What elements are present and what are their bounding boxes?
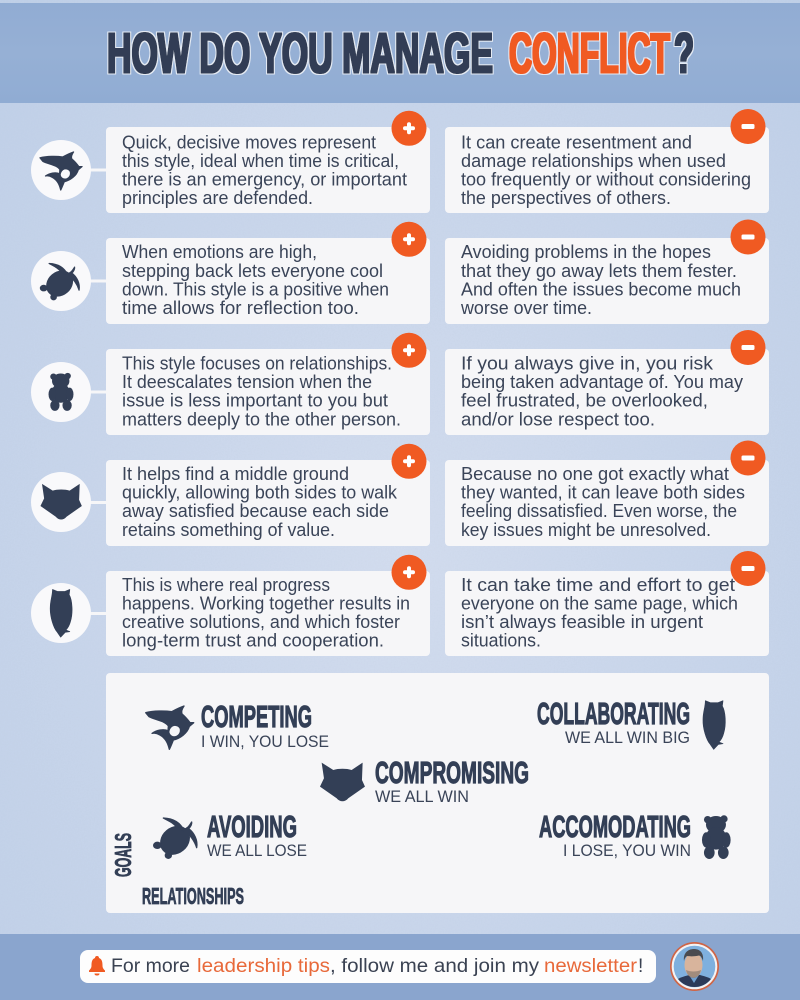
icon: owl badge bbox=[31, 583, 108, 643]
panel: competing con: It can create resentment and bbox=[461, 132, 692, 152]
panel: compromising con: Because no one got exactly what bbox=[461, 464, 729, 484]
panel: accommodating con: If you always give in, you risk bbox=[461, 354, 714, 374]
footer text: newsletter bbox=[544, 956, 638, 977]
panel: competing pro: principles are defended. bbox=[122, 188, 313, 208]
style: avoiding: AVOIDING bbox=[207, 809, 297, 844]
icon: plus bbox=[392, 111, 426, 146]
panel: competing con: too frequently or without considering bbox=[461, 170, 751, 190]
footer text: ! bbox=[638, 956, 643, 977]
row 4: compromising bbox=[31, 440, 769, 546]
panel: accommodating pro: It deescalates tension when the bbox=[122, 372, 372, 392]
header band bbox=[0, 3, 800, 103]
panel: avoiding pro: stepping back lets everyone cool bbox=[122, 261, 383, 281]
style: accommodating: I LOSE, YOU WIN bbox=[563, 842, 691, 860]
icon: minus bbox=[730, 440, 766, 476]
panel: accommodating con: feel frustrated, be overlooked, bbox=[461, 390, 708, 410]
footer text: leadership tips bbox=[197, 956, 330, 977]
panel: accommodating pro bbox=[106, 349, 430, 435]
panel: collaborating con: It can take time and effort to get bbox=[461, 575, 735, 595]
panel: compromising con bbox=[445, 460, 769, 546]
title: HOW DO YOU MANAGE bbox=[107, 22, 493, 86]
panel: styles grid bbox=[106, 673, 769, 913]
footer text: For more bbox=[111, 956, 190, 977]
panel: competing pro: this style, ideal when time is critical, bbox=[122, 151, 399, 171]
panel: collaborating pro: happens. Working together results in bbox=[122, 594, 410, 614]
icon: plus bbox=[392, 333, 426, 368]
panel: compromising con: they wanted, it can leave both sides bbox=[461, 482, 745, 502]
style: compromising: COMPROMISING bbox=[375, 755, 529, 790]
style: competing: COMPETING bbox=[201, 699, 312, 734]
style: competing bbox=[146, 699, 329, 751]
icon: minus bbox=[730, 551, 766, 586]
row 1: competing bbox=[31, 109, 769, 213]
panel: collaborating pro: This is where real progress bbox=[122, 575, 330, 595]
panel: collaborating con: situations. bbox=[461, 630, 541, 650]
style: compromising: WE ALL WIN bbox=[375, 788, 469, 806]
panel: avoiding pro: down. This style is a positive when bbox=[122, 280, 389, 300]
icon: fox badge bbox=[31, 472, 108, 532]
row 2: avoiding bbox=[31, 220, 769, 324]
style: collaborating: WE ALL WIN BIG bbox=[565, 729, 690, 747]
panel: compromising con: key issues might be unresolved. bbox=[461, 520, 711, 540]
icon: turtle badge bbox=[31, 251, 108, 311]
panel: accommodating con: being taken advantage of. You may bbox=[461, 372, 743, 392]
style: avoiding: WE ALL LOSE bbox=[207, 842, 307, 860]
icon: minus bbox=[730, 109, 766, 144]
panel: avoiding con: worse over time. bbox=[460, 298, 592, 318]
footer band bbox=[0, 934, 800, 1000]
panel: avoiding pro: When emotions are high, bbox=[122, 242, 317, 262]
panel: accommodating pro: issue is less important to you but bbox=[122, 390, 388, 410]
panel: compromising pro: away satisfied because each side bbox=[122, 501, 389, 521]
icon: bear badge bbox=[31, 362, 108, 422]
author portrait bbox=[670, 942, 719, 991]
row 5: collaborating bbox=[31, 551, 769, 656]
panel: competing con bbox=[445, 127, 769, 213]
panel: collaborating pro bbox=[106, 571, 430, 656]
panel: avoiding con bbox=[445, 238, 769, 324]
title: CONFLICT bbox=[509, 22, 670, 86]
title: ? bbox=[674, 22, 694, 86]
style: compromising bbox=[320, 755, 529, 806]
panel: avoiding pro bbox=[106, 238, 430, 324]
panel: collaborating pro: creative solutions, and which foster bbox=[122, 612, 400, 632]
panel: collaborating con: isn’t always feasible in urgent bbox=[461, 612, 703, 632]
icon: shark badge bbox=[31, 140, 108, 200]
icon: plus bbox=[392, 555, 426, 590]
footer callout bbox=[80, 950, 656, 983]
panel: compromising pro: quickly, allowing both sides to walk bbox=[122, 482, 398, 502]
panel: accommodating pro: matters deeply to the other person. bbox=[122, 410, 401, 430]
panel: accommodating con bbox=[445, 349, 769, 435]
style: collaborating bbox=[537, 696, 725, 749]
icon: minus bbox=[730, 330, 766, 365]
panel: avoiding con: Avoiding problems in the hopes bbox=[461, 242, 711, 262]
style: accommodating bbox=[539, 809, 731, 860]
panel: competing con: damage relationships when used bbox=[461, 151, 726, 171]
panel: avoiding pro: time allows for reflection too. bbox=[122, 298, 359, 318]
panel: avoiding con: And often the issues become much bbox=[461, 280, 741, 300]
panel: competing pro bbox=[106, 127, 430, 213]
style: accommodating: ACCOMODATING bbox=[539, 809, 691, 844]
axis label: relationships: RELATIONSHIPS bbox=[142, 883, 244, 909]
style: collaborating: COLLABORATING bbox=[537, 696, 690, 731]
panel: collaborating pro: long-term trust and cooperation. bbox=[122, 630, 384, 650]
panel: accommodating pro: This style focuses on relationships. bbox=[122, 354, 392, 374]
style: avoiding bbox=[154, 809, 307, 860]
panel: collaborating con bbox=[445, 571, 769, 656]
panel: compromising pro: retains something of value. bbox=[122, 520, 335, 540]
panel: avoiding con: that they go away lets them fester. bbox=[461, 261, 737, 281]
panel: compromising con: feeling dissatisfied. Even worse, the bbox=[461, 501, 737, 521]
footer text: , follow me and join my bbox=[330, 956, 540, 977]
panel: competing pro: Quick, decisive moves represent bbox=[122, 132, 376, 152]
style: competing: I WIN, YOU LOSE bbox=[201, 733, 329, 751]
icon: minus bbox=[730, 220, 766, 254]
panel: competing pro: there is an emergency, or important bbox=[122, 170, 407, 190]
icon: plus bbox=[392, 444, 426, 479]
panel: competing con: the perspectives of others. bbox=[461, 188, 671, 208]
panel: collaborating con: everyone on the same page, which bbox=[461, 594, 738, 614]
panel: compromising pro bbox=[106, 460, 430, 546]
panel: compromising pro: It helps find a middle ground bbox=[122, 464, 349, 484]
axis label: goals: GOALS bbox=[110, 833, 136, 877]
panel: accommodating con: and/or lose respect too. bbox=[461, 410, 655, 430]
row 3: accommodating bbox=[31, 330, 769, 435]
icon: plus bbox=[392, 222, 426, 257]
icon: bell bbox=[89, 956, 105, 976]
footer text bbox=[111, 956, 643, 977]
